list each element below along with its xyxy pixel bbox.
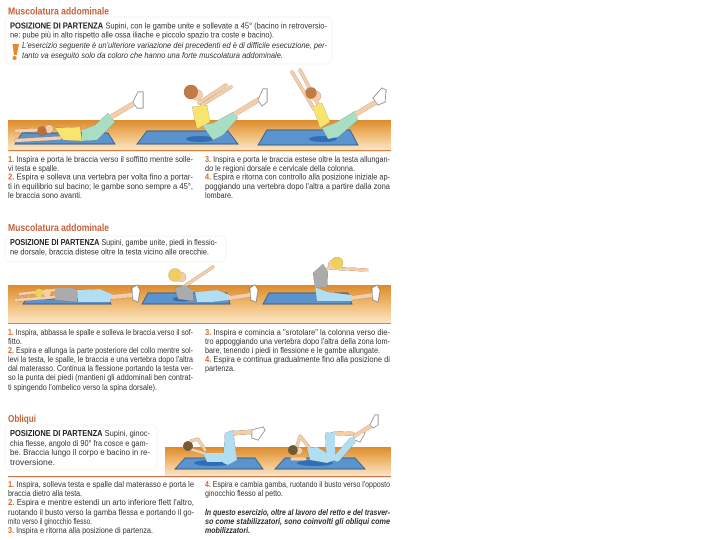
instructions right column: ginocchio flesso al petto. (205, 489, 283, 498)
figure 2: torso raised, arms forward (137, 85, 267, 144)
figure 2: oblique twist with extended leg (275, 415, 378, 469)
instructions left column: le braccia sono avanti. (8, 191, 82, 200)
figure 1: lying flat with arms overhead (16, 285, 140, 304)
panel: exercise 1 (5, 6, 391, 200)
instructions left column: 2. Espira e mentre estendi un arto inferiore flett l'altro, (8, 498, 194, 507)
heading: Obliqui: Obliqui (8, 414, 36, 425)
instructions right column: partenza. (205, 364, 235, 373)
instructions right column: 3. Inspira e comincia a "srotolare" la colonna verso die- (205, 328, 390, 337)
starting position box: ne dorsale, braccia distese oltre la testa vicino alle orecchie. (10, 248, 209, 256)
instructions left column: 1. Inspira, abbassa le spalle e solleva le braccia verso il sof- (8, 328, 193, 337)
illustration: three positions on orange band (8, 257, 391, 324)
figure 3: torso raised, arms overhead (258, 70, 386, 145)
instructions left column: ti spingendo l'ombelico verso la spina dorsale). (8, 383, 157, 392)
instructions right column (205, 328, 390, 373)
instructions left column: 2. Espira e solleva una vertebra per volta fino a portar- (8, 172, 193, 182)
figure 2: head and shoulders lifted (142, 267, 258, 304)
starting position box: be. Braccia lungo il corpo e bacino in re- (10, 448, 150, 457)
instructions right column: tro appoggiando una vertebra dopo l'altra della zona lom- (205, 337, 390, 346)
instructions right column: 3. Inspira e porta le braccia estese oltre la testa allungan- (205, 155, 390, 164)
illustration: three positions on orange band (8, 70, 391, 151)
instructions left column: mito verso il ginocchio flesso. (8, 517, 92, 526)
instructions right column: poggiando una vertebra dopo l'altra a partire dalla zona (205, 182, 391, 191)
instructions right column: 4. Espira e cambia gamba, ruotando il busto verso l'opposto (205, 480, 390, 489)
instructions right column: lombare. (205, 191, 233, 200)
instructions left column (8, 155, 193, 200)
illustration: two positions on orange band (8, 415, 391, 477)
instructions left column: ti in equilibrio sul bacino; le gambe sono sempre a 45°, (8, 182, 193, 191)
instructions left column (8, 328, 193, 392)
instructions right column: In questo esercizio, oltre al lavoro del retto e del trasver- (205, 508, 390, 517)
instructions right column: 4. Espira e ritorna con controllo alla posizione iniziale ap- (205, 172, 390, 182)
figure 1: crunch with bent knees (175, 427, 265, 469)
panel: exercise 3 (5, 414, 391, 535)
starting position box (5, 17, 332, 64)
starting position box: ne: pube più in alto rispetto alle ossa iliache e piccolo spazio tra coste e bacino). (10, 30, 274, 40)
instructions left column: 3. Inspira e ritorna alla posizione di partenza. (8, 526, 153, 535)
starting position box (5, 236, 226, 262)
starting position box: tanto va eseguito solo da coloro che hanno una forte muscolatura addominale. (22, 51, 283, 60)
instructions right column: so come stabilizzatori, sono coinvolti gli obliqui come (205, 517, 390, 526)
starting position box: POSIZIONE DI PARTENZA Supini, ginoc- (10, 429, 150, 438)
starting position box: chia flesse, angolo di 90° fra cosce e gam- (10, 439, 148, 448)
instructions right column: mobilizzatori. (205, 526, 250, 535)
instructions left column (8, 480, 195, 535)
instructions left column: 1. Inspira, solleva testa e spalle dal materasso e porta le (8, 480, 195, 489)
starting position box: troversione. (10, 458, 55, 467)
starting position box: L'esercizio seguente è un'ulteriore variazione dei precedenti ed è di difficile esecuzione, per- (22, 41, 327, 50)
instructions left column: 2. Espira e allunga la parte posteriore del collo mentre sol- (8, 346, 193, 355)
instructions left column: so la punta dei piedi (mantieni gli addominali ben contrat- (8, 373, 193, 382)
starting position box (5, 425, 157, 470)
instructions right column: do le regioni dorsale e cervicale della colonna. (205, 164, 355, 173)
heading: Muscolatura addominale 1: Muscolatura addominale (8, 6, 109, 18)
figure 1: lying with legs raised (15, 92, 143, 144)
instructions left column: fitto. (8, 337, 22, 346)
instructions right column (205, 155, 391, 200)
instructions left column: ruotando il busto verso la gamba flessa e portando il go- (8, 508, 194, 517)
instructions right column: bare, tenendo i piedi in flessione e le gambe allungate. (205, 346, 380, 355)
instructions left column: vi testa e spalle. (8, 164, 59, 173)
heading: Muscolatura addominale 2: Muscolatura addominale (8, 223, 109, 234)
instructions left column: braccia dietro alla testa. (8, 489, 82, 498)
instructions right column: 4. Espira e continua gradualmente fino alla posizione di (205, 355, 390, 364)
icon: exclamation mark (12, 44, 19, 60)
instructions left column: dal materasso. Continua la flessione portando la testa ver- (8, 364, 193, 373)
starting position box: POSIZIONE DI PARTENZA Supini, con le gambe unite e sollevate a 45° (bacino in retroversio- (10, 22, 327, 30)
instructions left column: 1. Inspira e porta le braccia verso il soffitto mentre solle- (8, 155, 193, 164)
figure 3: torso rolled forward (263, 257, 380, 304)
starting position box: POSIZIONE DI PARTENZA Supini, gambe unite, piedi in flessio- (10, 238, 217, 247)
instructions right column (205, 480, 390, 535)
instructions left column: levi la testa, le spalle, le braccia e una vertebra dopo l'altra (8, 355, 193, 364)
panel: exercise 2 (5, 223, 391, 392)
